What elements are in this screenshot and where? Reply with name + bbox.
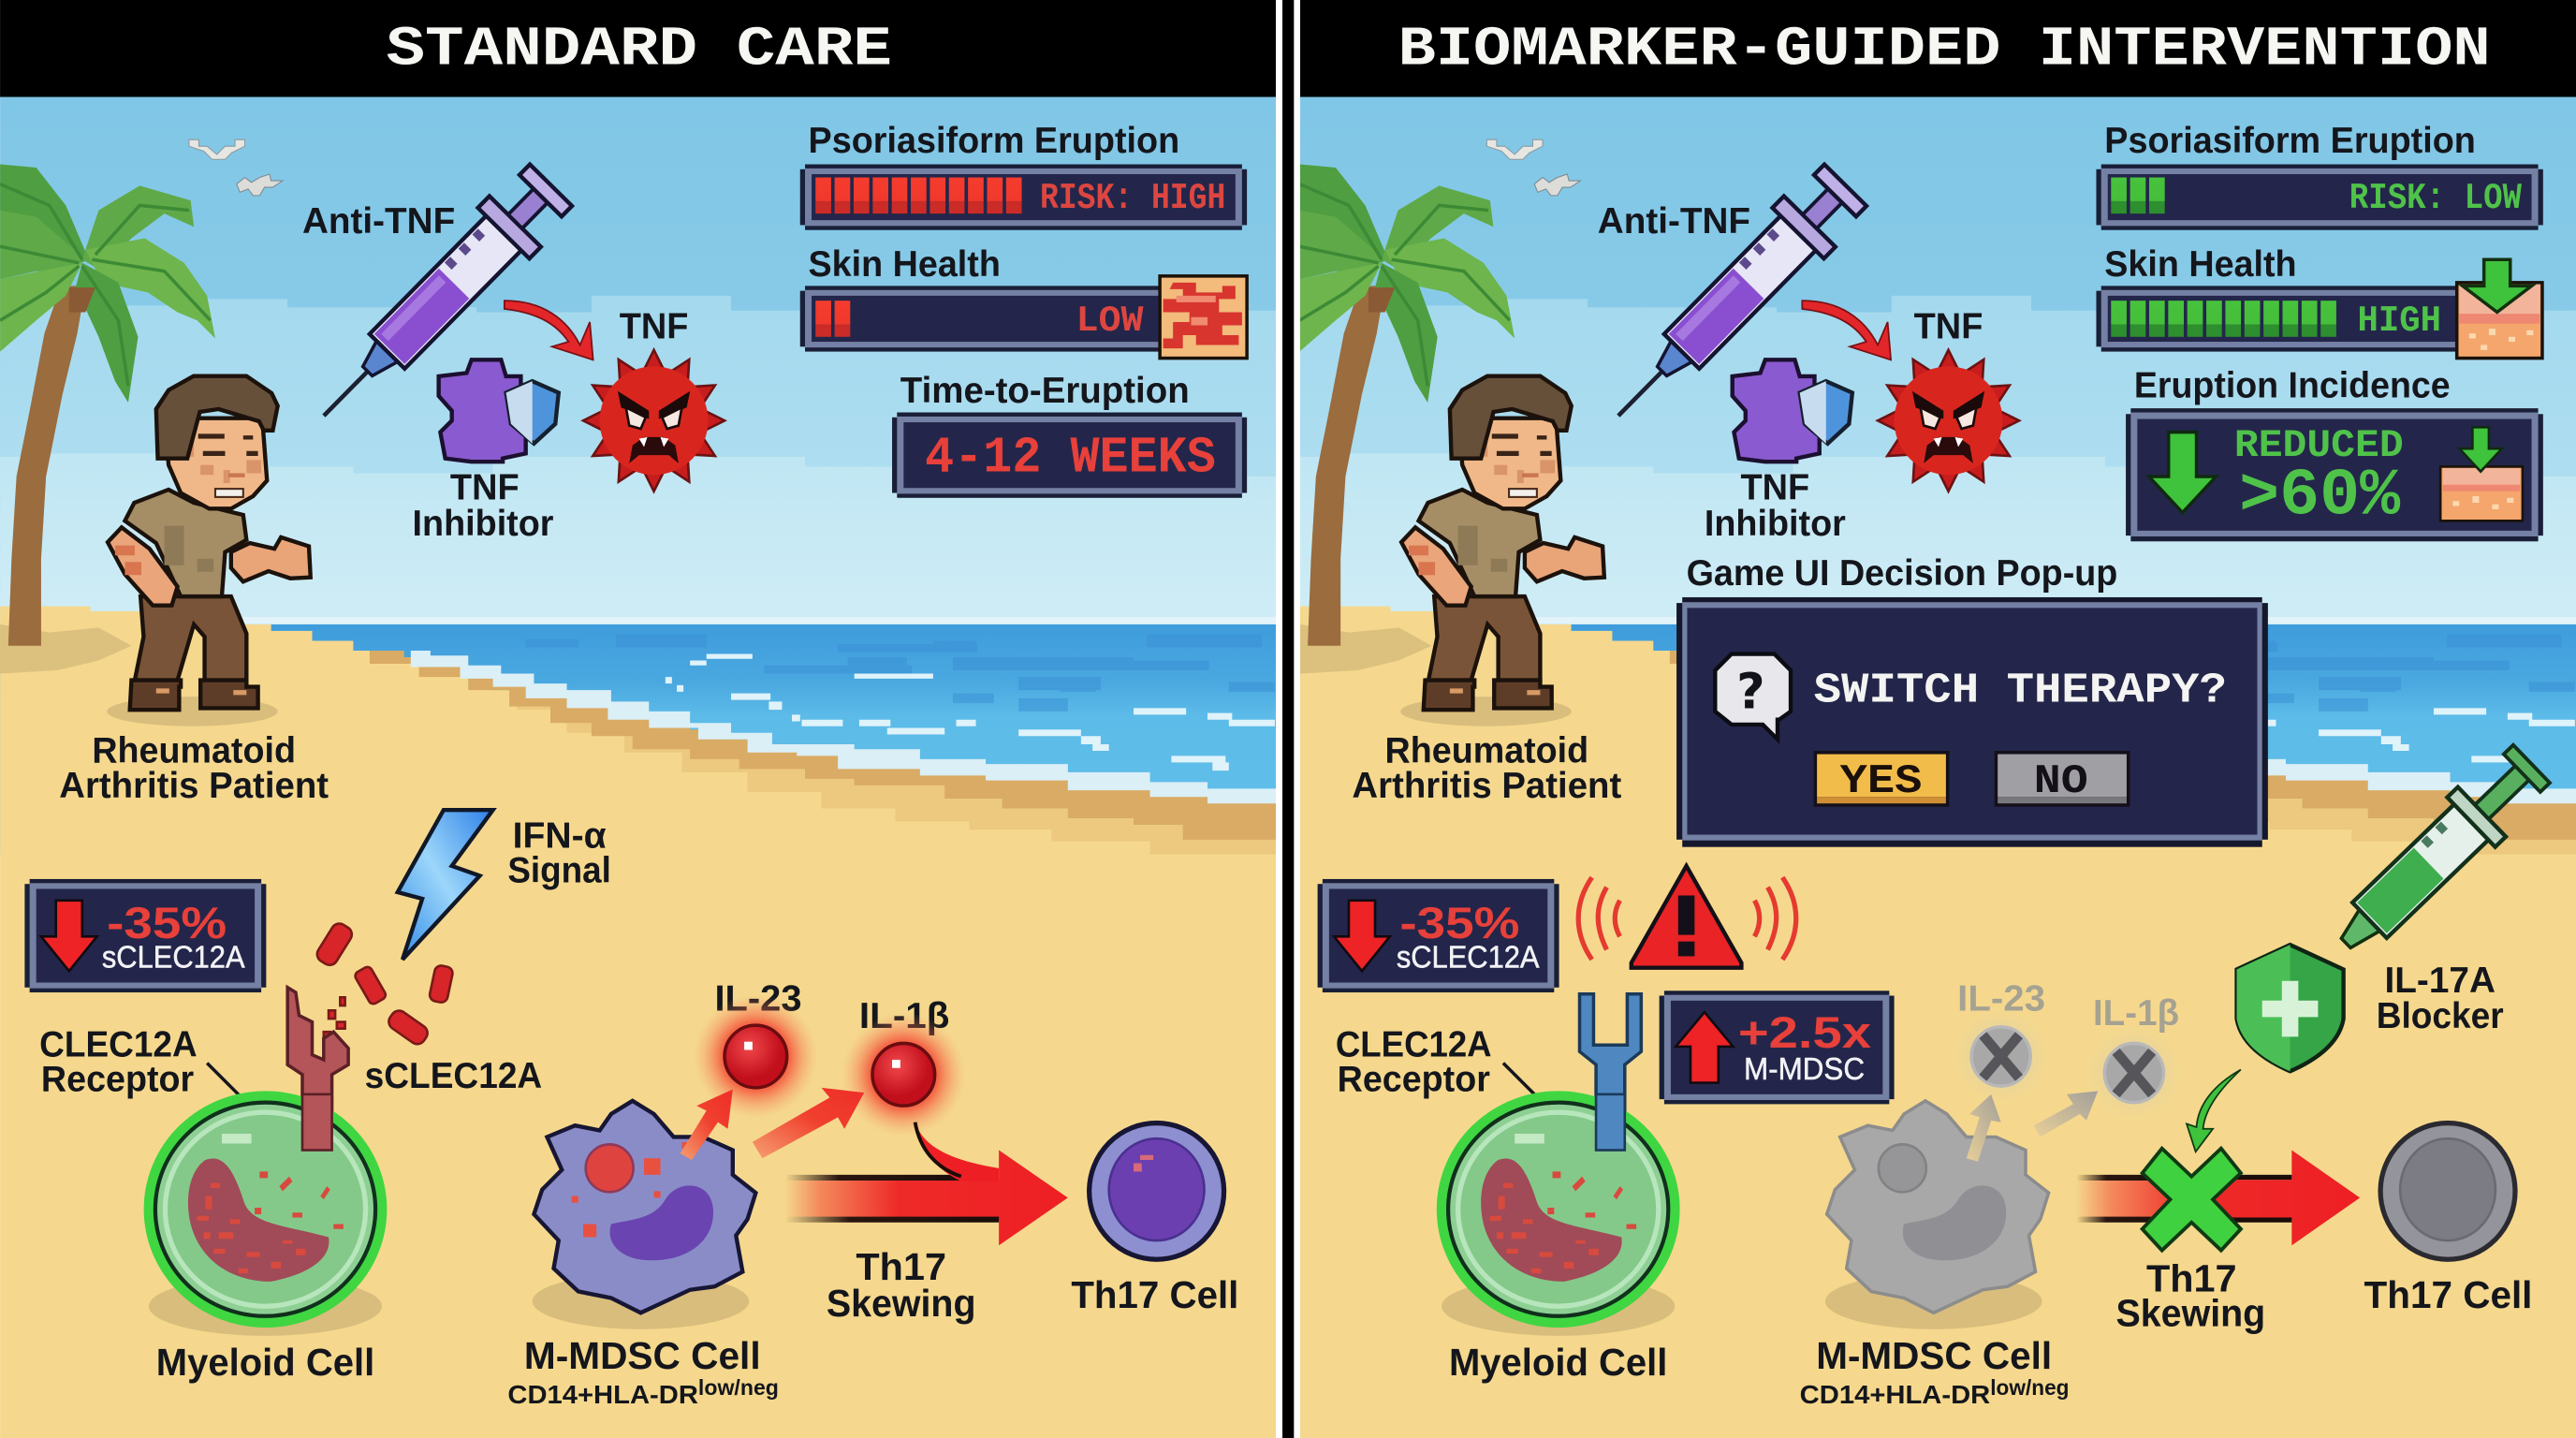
M-MDSC cell, greyed out — [1825, 1101, 2049, 1329]
HUD: skin health — [2096, 244, 2542, 359]
label: IFN-alpha signal — [507, 816, 611, 890]
label: Th17 skewing: Th17 — [856, 1245, 946, 1288]
cytokine: IL-1 beta — [842, 996, 966, 1137]
arrow: green curved to block — [2187, 1070, 2241, 1152]
blocked cytokine: IL-23 — [1952, 978, 2050, 1106]
myeloid cell — [149, 1094, 382, 1336]
patient label — [59, 730, 329, 806]
cytokine: IL-23: IL-23 — [714, 978, 802, 1019]
icon: anti-TNF syringe — [1592, 160, 1871, 441]
callout: sCLEC12A down 35% — [24, 879, 266, 992]
label: Anti-TNF: Anti-TNF — [1598, 201, 1750, 242]
HUD: psoriasiform eruption risk: Psoriasiform Eruption — [2104, 121, 2476, 161]
label: IL-17A blocker: IL-17A — [2384, 961, 2496, 1001]
label: TNF inhibitor: Inhibitor — [1705, 504, 1846, 544]
icon: green shield — [2237, 945, 2344, 1071]
callout: M-MDSC up 2.5x: M-MDSC — [1744, 1052, 1865, 1087]
button: yes — [1814, 751, 1949, 807]
label: CLEC12A receptor — [39, 1024, 248, 1104]
icon: TNF inhibitor — [439, 360, 559, 462]
cytokine: IL-1 beta: IL-1β — [859, 996, 949, 1036]
icon: question bubble: ? — [1736, 663, 1765, 720]
label: Th17 skewing: Skewing — [827, 1282, 976, 1325]
HUD: skin health: LOW — [1076, 301, 1144, 342]
HUD: time to eruption — [892, 371, 1247, 498]
Th17 cell — [1090, 1123, 1224, 1259]
label: Th17 skewing: Skewing — [2116, 1291, 2265, 1334]
arrow: inhibitor toward TNF — [1802, 301, 1891, 360]
patient character — [1400, 376, 1604, 726]
icon: damaged CLEC12A receptor — [287, 988, 348, 1151]
label: myeloid cell: Myeloid Cell — [156, 1341, 374, 1384]
callout: sCLEC12A down 35%: -35% — [1399, 899, 1519, 948]
icon: green IL-17A syringe — [2322, 739, 2555, 968]
HUD: skin health: Skin Health — [2104, 244, 2297, 285]
label: M-MDSC cell: M-MDSC Cell — [524, 1334, 761, 1377]
icon: healthy skin with green arrow — [2440, 427, 2523, 521]
label: Th17 skewing: Th17 — [2146, 1256, 2237, 1299]
label: CLEC12A receptor: Receptor — [1338, 1059, 1490, 1099]
cytokine: IL-23 — [694, 978, 818, 1119]
dialog: switch therapy: SWITCH THERAPY? — [1814, 666, 2227, 714]
button: no — [1995, 751, 2130, 807]
arrow: M-MDSC to IL-1 beta — [753, 1088, 864, 1158]
icon: IFN-alpha lightning bolt — [398, 810, 493, 960]
label: TNF inhibitor — [413, 468, 554, 544]
beach background — [0, 97, 1277, 1438]
blocked cytokine: IL-23: IL-23 — [1957, 978, 2045, 1019]
label: IL-17A blocker — [2377, 961, 2504, 1036]
label: Th17 cell: Th17 Cell — [2364, 1273, 2532, 1316]
M-MDSC cell — [533, 1101, 755, 1329]
label: M-MDSC cell — [1800, 1334, 2070, 1409]
HUD: eruption incidence: Eruption Incidence — [2134, 366, 2451, 406]
label: IL-17A blocker: Blocker — [2377, 996, 2504, 1036]
label: CLEC12A receptor: Receptor — [41, 1059, 194, 1099]
icon: question bubble — [1715, 654, 1791, 740]
icon: healthy CLEC12A receptor — [1580, 994, 1641, 1151]
heading: decision pop-up: Game UI Decision Pop-up — [1687, 553, 2117, 594]
arrow: inhibitor toward TNF — [505, 301, 593, 360]
callout: sCLEC12A down 35%: sCLEC12A — [102, 941, 245, 976]
HUD: psoriasiform eruption risk — [800, 121, 1247, 230]
icon: green X block — [2143, 1149, 2241, 1251]
HUD: psoriasiform eruption risk: Psoriasiform Eruption — [809, 121, 1179, 161]
patient label: Arthritis Patient — [59, 766, 329, 806]
label: M-MDSC cell: CD14+HLA-DR — [1800, 1380, 1990, 1409]
label: CLEC12A receptor: CLEC12A — [1336, 1024, 1492, 1064]
callout: M-MDSC up 2.5x — [1660, 990, 1895, 1104]
label: TNF: TNF — [620, 307, 688, 347]
header bar: biomarker-guided — [1300, 0, 2576, 97]
label: TNF inhibitor: Inhibitor — [413, 504, 554, 544]
blocked cytokine: IL-1 beta — [2085, 993, 2183, 1123]
icon: TNF inhibitor — [1733, 360, 1852, 462]
arrow: faded to IL-23 — [1967, 1094, 2001, 1162]
HUD: eruption incidence: REDUCED — [2234, 423, 2404, 468]
label: M-MDSC cell: CD14+HLA-DR — [507, 1380, 698, 1409]
label: Anti-TNF: Anti-TNF — [302, 201, 455, 242]
icon: palm tree — [0, 165, 215, 646]
panel divider — [1282, 0, 1294, 1438]
label: TNF inhibitor: TNF — [450, 468, 520, 508]
HUD: psoriasiform eruption risk: RISK: HIGH — [1040, 178, 1225, 219]
arrow: blocked Th17 skewing — [2076, 1151, 2360, 1245]
HUD: psoriasiform eruption risk — [2096, 121, 2543, 230]
dialog: switch therapy — [1676, 597, 2268, 847]
HUD: time to eruption: Time-to-Eruption — [900, 371, 1190, 411]
label: sCLEC12A: sCLEC12A — [365, 1056, 542, 1096]
arrow: Th17 skewing — [785, 1123, 1068, 1245]
header bar: biomarker-guided: BIOMARKER-GUIDED INTERVENTION — [1398, 17, 2491, 81]
header bar: standard care: STANDARD CARE — [386, 17, 892, 81]
patient label: Rheumatoid — [1385, 730, 1588, 770]
patient label: Arthritis Patient — [1352, 766, 1621, 806]
label: TNF inhibitor — [1705, 468, 1846, 544]
icon: angry TNF virus — [1878, 350, 2019, 492]
Th17 cell, greyed out — [2380, 1123, 2515, 1259]
header bar: standard care — [0, 0, 1276, 97]
icon: damaged skin — [1160, 276, 1247, 359]
label: Th17 cell: Th17 Cell — [1071, 1273, 1238, 1316]
icon: shed sCLEC12A fragments — [315, 920, 454, 1048]
beach background — [1300, 97, 2576, 1438]
label: M-MDSC cell: low/neg — [698, 1375, 779, 1400]
panel: standard care — [0, 0, 1277, 1438]
icon: anti-TNF syringe — [298, 160, 577, 441]
HUD: skin health: Skin Health — [809, 244, 1001, 285]
HUD: psoriasiform eruption risk: RISK: LOW — [2349, 178, 2523, 219]
label: M-MDSC cell: low/neg — [1990, 1375, 2070, 1400]
arrow: M-MDSC to IL-23 — [681, 1090, 733, 1160]
icon: alert triangle with waves — [1578, 866, 1796, 968]
patient label: Rheumatoid — [92, 730, 296, 770]
label: IFN-alpha signal: Signal — [507, 850, 611, 890]
icon: angry TNF virus — [583, 350, 724, 492]
patient character — [107, 376, 311, 726]
label: M-MDSC cell — [507, 1334, 779, 1409]
label: M-MDSC cell: M-MDSC Cell — [1816, 1334, 2052, 1377]
label: TNF inhibitor: TNF — [1741, 468, 1809, 508]
HUD: skin health: HIGH — [2358, 301, 2441, 342]
callout: sCLEC12A down 35%: sCLEC12A — [1397, 941, 1540, 976]
icon: palm tree — [1299, 165, 1515, 646]
label: myeloid cell: Myeloid Cell — [1449, 1341, 1667, 1384]
button: no: NO — [2034, 758, 2088, 805]
patient label — [1352, 730, 1621, 806]
myeloid cell — [1442, 1094, 1675, 1336]
HUD: eruption incidence — [2126, 366, 2543, 541]
label: TNF: TNF — [1914, 307, 1983, 347]
label: Th17 skewing — [827, 1245, 976, 1325]
label: IFN-alpha signal: IFN-α — [513, 816, 607, 857]
HUD: time to eruption: 4-12 WEEKS — [925, 431, 1216, 488]
icon: large green down arrow — [2149, 433, 2217, 513]
icon: healing skin with green arrow — [2457, 259, 2542, 359]
blocked cytokine: IL-1 beta: IL-1β — [2093, 993, 2179, 1034]
label: CLEC12A receptor: CLEC12A — [39, 1024, 198, 1064]
HUD: eruption incidence: >60% — [2239, 460, 2401, 534]
panel: biomarker-guided intervention — [1299, 0, 2576, 1438]
button: yes: YES — [1840, 758, 1922, 805]
HUD: skin health — [800, 244, 1247, 359]
arrow: faded to IL-1 beta — [2034, 1091, 2098, 1137]
callout: M-MDSC up 2.5x: +2.5x — [1738, 1008, 1871, 1058]
callout: sCLEC12A down 35%: -35% — [107, 899, 227, 948]
label: CLEC12A receptor — [1336, 1024, 1544, 1104]
callout: sCLEC12A down 35% — [1318, 879, 1559, 992]
icon: seagulls — [1486, 139, 1580, 196]
icon: seagulls — [189, 139, 283, 196]
label: Th17 skewing — [2116, 1256, 2265, 1334]
